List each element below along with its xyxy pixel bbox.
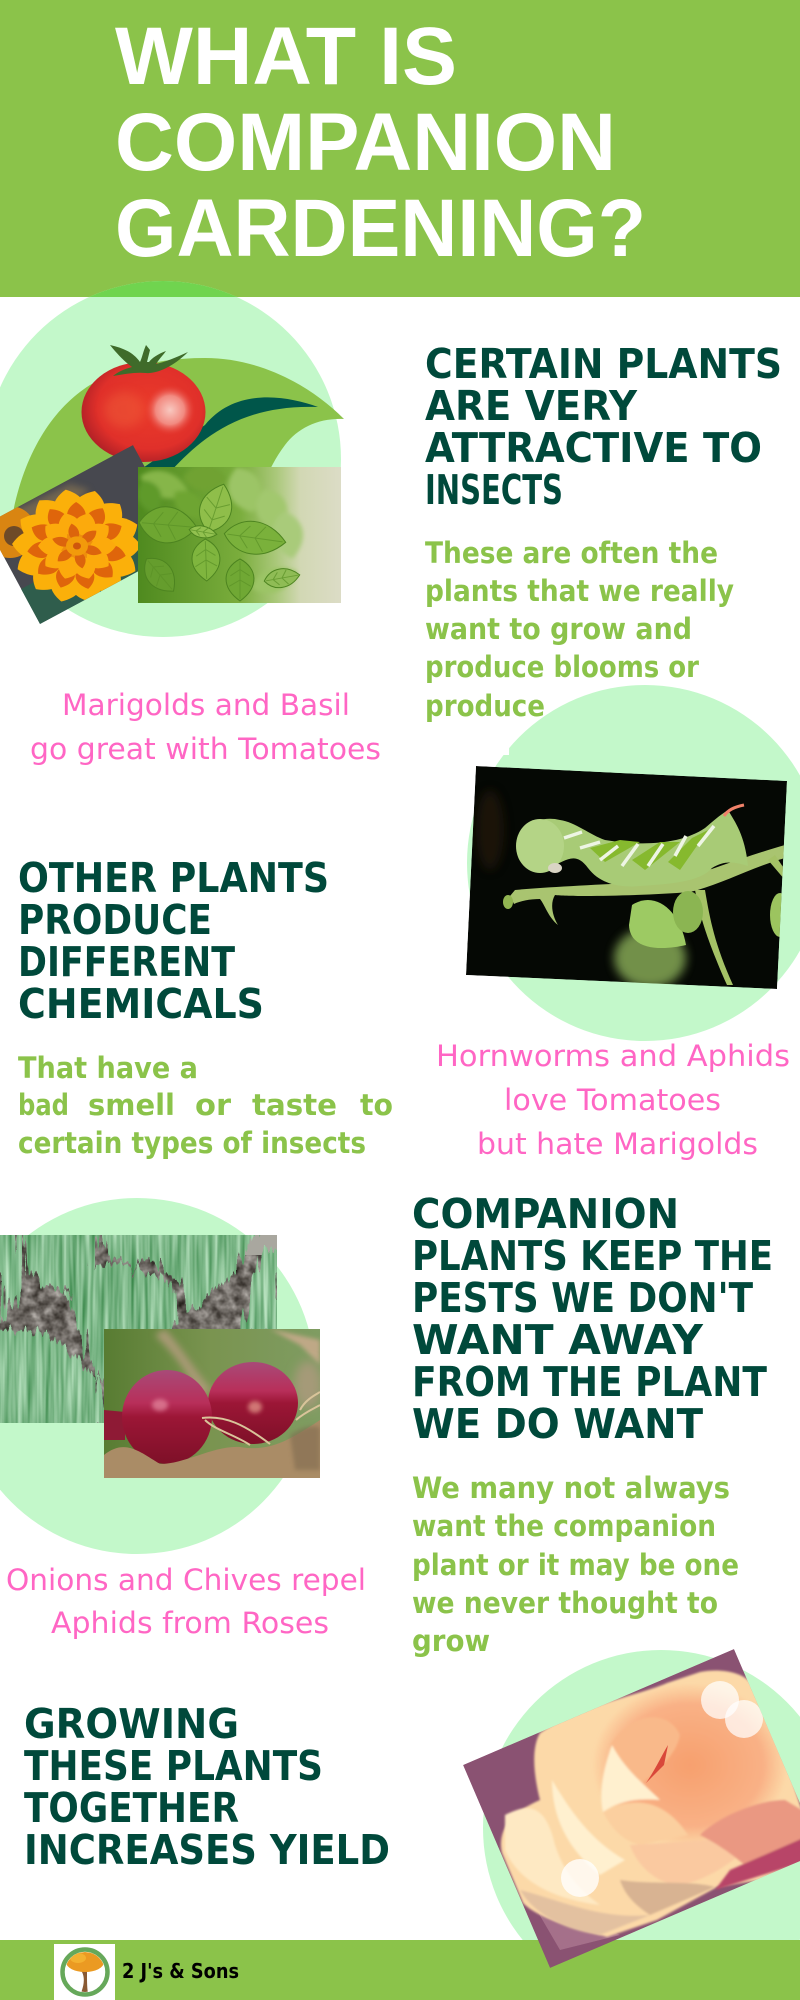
- text block: bad smell or taste: smell: [88, 1088, 175, 1122]
- heading: certain plants: ARE VERY: [425, 382, 638, 430]
- heading: other plants: PRODUCE: [18, 896, 212, 944]
- heading: growing together: INCREASES YIELD: [24, 1826, 390, 1874]
- header band: [0, 0, 800, 297]
- marigold bloom: [11, 487, 143, 605]
- panel: marigolds, basil and tomato: [0, 281, 344, 637]
- caption: marigolds and basil: Marigolds and Basil: [62, 688, 350, 722]
- text block: companion plant note: [412, 1471, 739, 1658]
- heading: other plants: OTHER PLANTS: [18, 854, 329, 902]
- circle cut-out behind text: [440, 680, 510, 775]
- text block: bad smell or taste: That have a: [18, 1051, 198, 1085]
- text block: plants we want to grow: plants that we really: [425, 574, 734, 608]
- caption: onions and chives: Aphids from Roses: [51, 1606, 329, 1640]
- heading: other plants: DIFFERENT: [18, 938, 235, 986]
- photo: chives: [0, 1226, 282, 1430]
- heading: growing together: GROWING: [24, 1700, 239, 1748]
- footer band: [0, 1940, 800, 2000]
- footer logo: [54, 1944, 115, 2000]
- heading: growing together: THESE PLANTS: [24, 1742, 323, 1790]
- text block: plants we want to grow: These are often the: [425, 536, 718, 570]
- icon: leaf: [10, 358, 344, 560]
- caption: marigolds and basil: [30, 688, 381, 766]
- background circle: [0, 1198, 315, 1554]
- text block: plants we want to grow: produce: [425, 689, 545, 723]
- text block: companion plant note: We many not always: [412, 1471, 730, 1505]
- caption: hornworms and aphids: love Tomatoes: [504, 1083, 721, 1117]
- text block: bad smell or taste: [18, 1051, 393, 1160]
- panel: chives and onions: [0, 1198, 322, 1554]
- caption: onions and chives: [6, 1563, 366, 1640]
- title: COMPANION: [115, 97, 616, 188]
- heading: companion plants: PESTS WE DON'T: [412, 1274, 753, 1322]
- heading: certain plants: [425, 340, 782, 514]
- heading: certain plants: ATTRACTIVE TO: [425, 424, 762, 472]
- heading: other plants: CHEMICALS: [18, 980, 264, 1028]
- photo: red onions: [104, 1329, 322, 1478]
- text block: plants we want to grow: [425, 536, 734, 723]
- heading: other plants: [18, 854, 329, 1028]
- heading: growing together: TOGETHER: [24, 1784, 239, 1832]
- title: [115, 11, 646, 274]
- photo: rose: [463, 1649, 800, 1968]
- text block: bad smell or taste: or: [195, 1088, 232, 1122]
- caption: marigolds and basil: go great with Tomatoes: [30, 732, 381, 766]
- circle overlap with header: [90, 281, 236, 297]
- photo: marigold: [0, 445, 145, 624]
- heading: certain plants: INSECTS: [425, 466, 563, 514]
- heading: companion plants: WANT AWAY: [412, 1316, 704, 1364]
- background circle: [0, 281, 341, 637]
- footer brand name: 2 J's & Sons: [122, 1959, 239, 1983]
- heading: growing together: [24, 1700, 390, 1874]
- text block: companion plant note: plant or it may be one: [412, 1548, 739, 1582]
- text block: plants we want to grow: produce blooms or: [425, 650, 700, 684]
- icon: tomato: [82, 345, 206, 462]
- caption: hornworms and aphids: [436, 1039, 790, 1161]
- text block: bad smell or taste: to: [360, 1088, 393, 1122]
- text block: bad smell or taste: certain types of insects: [18, 1126, 366, 1160]
- background circle: rose: [483, 1650, 800, 2000]
- text block: companion plant note: grow: [412, 1624, 490, 1658]
- panel: hornworm: [440, 680, 800, 1041]
- photo: basil: [133, 462, 341, 603]
- text block: bad smell or taste: bad: [18, 1088, 69, 1122]
- caption: hornworms and aphids: Hornworms and Aphids: [436, 1039, 790, 1073]
- text block: companion plant note: want the companion: [412, 1509, 716, 1543]
- photo: hornworm on stem: [466, 766, 790, 989]
- text block: companion plant note: we never thought to: [412, 1586, 718, 1620]
- text block: plants we want to grow: want to grow and: [425, 612, 692, 646]
- text block: bad smell or taste: taste: [252, 1088, 337, 1122]
- background circle: [467, 685, 800, 1041]
- caption: onions and chives: Onions and Chives repel: [6, 1563, 366, 1597]
- heading: companion plants: COMPANION: [412, 1190, 679, 1238]
- heading: companion plants: WE DO WANT: [412, 1400, 703, 1448]
- caption: hornworms and aphids: but hate Marigolds: [477, 1127, 758, 1161]
- title: GARDENING?: [115, 183, 646, 274]
- leaf vein: [140, 397, 318, 470]
- title: WHAT IS: [115, 11, 457, 102]
- heading: companion plants: [412, 1190, 773, 1448]
